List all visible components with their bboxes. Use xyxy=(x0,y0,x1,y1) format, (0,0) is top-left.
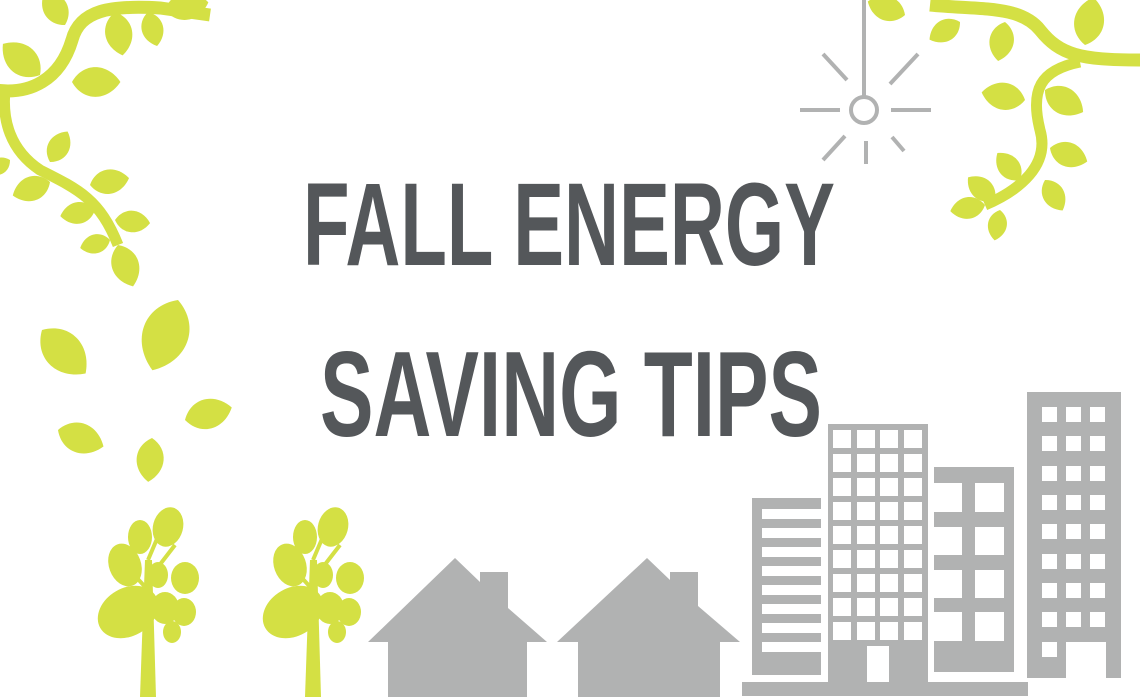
building 3 xyxy=(934,467,1014,672)
title: SAVING TIPS xyxy=(320,326,822,462)
title xyxy=(303,159,835,462)
vine: top right xyxy=(864,0,1140,242)
buildings xyxy=(742,392,1121,696)
falling leaves xyxy=(29,292,236,483)
trees xyxy=(88,504,364,697)
building 2 xyxy=(828,424,928,684)
building 1 xyxy=(752,498,821,675)
building 4 xyxy=(1027,392,1121,678)
houses xyxy=(368,558,740,697)
title: FALL ENERGY xyxy=(303,159,835,291)
icon: hanging light xyxy=(800,0,931,164)
vine: top left xyxy=(0,0,211,291)
